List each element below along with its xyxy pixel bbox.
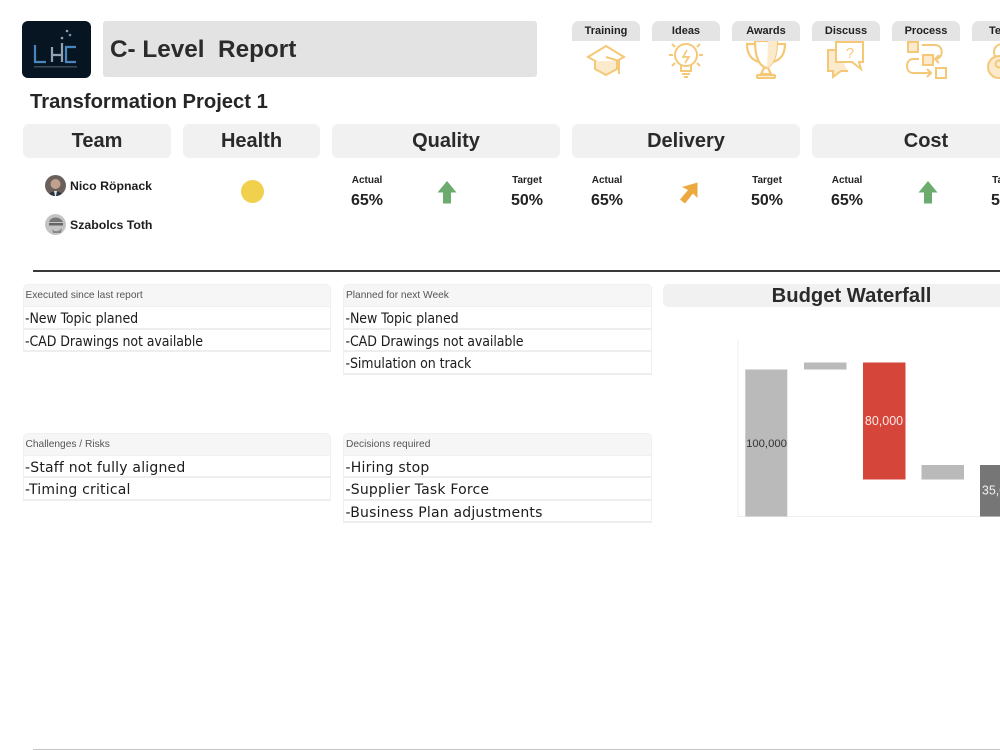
name: Szabolcs Toth: Szabolcs Toth [70, 218, 152, 232]
tab: Awards: Awards [746, 25, 786, 37]
item: -New Topic planed [346, 311, 459, 327]
icon: process flow [906, 41, 947, 79]
panel heading: Challenges / Risks [26, 438, 110, 450]
tab: Process: Process [905, 25, 947, 37]
header: Team [23, 124, 171, 158]
icon: quality arrow up [438, 181, 456, 204]
icon: delivery arrow diagonal [680, 182, 698, 204]
quality actual label: Actual [352, 174, 382, 186]
item: -Timing critical [25, 482, 131, 498]
item [343, 330, 652, 352]
panel heading: Planned for next Week [346, 290, 449, 301]
item [22, 330, 331, 352]
icon: discussion bubbles [827, 41, 864, 79]
tab: Ideas: Ideas [672, 25, 700, 37]
bar: 80,000 [863, 362, 906, 480]
panel: challenges and risks [23, 433, 331, 501]
title bar [103, 21, 537, 77]
tab: Ideas [652, 21, 720, 41]
logo [22, 21, 91, 78]
item: -New Topic planed [25, 311, 138, 327]
delivery actual value: 65% [591, 192, 623, 209]
item [343, 352, 652, 374]
icon: graduation cap [586, 44, 626, 76]
panel heading [343, 432, 652, 456]
quality actual value: 65% [351, 192, 383, 209]
icon: trophy [746, 41, 786, 79]
bar: 100,000: 100,000 [746, 438, 787, 450]
panel heading [22, 432, 331, 456]
item: -CAD Drawings not available [346, 334, 523, 350]
tab: Training: Training [585, 25, 627, 37]
tab: Training [572, 21, 640, 41]
avatar: Nico Röpnack [45, 175, 66, 196]
bar: step down [922, 465, 964, 480]
panel heading [22, 284, 331, 307]
header: Health [183, 124, 320, 158]
item: -Supplier Task Force [346, 482, 489, 498]
delivery actual label: Actual [592, 174, 622, 186]
bar: 100,000 [745, 370, 787, 516]
panel heading [343, 284, 652, 307]
delivery target value: 50% [751, 192, 783, 209]
header: Delivery: Delivery [647, 130, 725, 152]
health status dot [241, 180, 264, 203]
bar: 35,000 [980, 465, 1000, 516]
header: Quality [332, 124, 560, 158]
item: -Hiring stop [346, 460, 429, 476]
chart: budget waterfall [738, 340, 1000, 517]
avatar: Szabolcs Toth [45, 214, 66, 235]
tab: Discuss [812, 21, 880, 41]
panel: planned for next week [343, 284, 652, 375]
item [22, 478, 331, 500]
item [343, 456, 652, 478]
item: -Staff not fully aligned [25, 460, 185, 476]
title bar: C- Level Report [110, 36, 296, 63]
item [22, 307, 331, 330]
subtitle: Transformation Project 1 [30, 91, 268, 113]
item: -Business Plan adjustments [346, 504, 543, 520]
quality target value: 50% [511, 192, 543, 209]
item [22, 456, 331, 478]
item [343, 500, 652, 523]
delivery target label: Target [752, 174, 782, 186]
header: Cost [812, 124, 1000, 158]
bar: small step [804, 362, 846, 370]
tab: Process [892, 21, 960, 41]
panel heading: Executed since last report [26, 290, 143, 301]
header: Delivery [572, 124, 800, 158]
icon: light bulb [669, 43, 703, 78]
tab: Discuss: Discuss [825, 25, 867, 37]
panel: executed since last report [23, 284, 331, 352]
item [343, 307, 652, 330]
header: Quality: Quality [412, 130, 480, 152]
header: Health: Health [221, 130, 282, 152]
header: Team: Team [72, 130, 122, 152]
item [343, 478, 652, 500]
tab: Team [972, 21, 1000, 41]
item: -Simulation on track [346, 356, 471, 372]
panel: decisions required [343, 433, 652, 523]
panel heading: Decisions required [346, 438, 430, 450]
cost actual label: Actual [832, 174, 862, 186]
icon: cost arrow up [918, 181, 938, 204]
tab: Awards [732, 21, 800, 41]
heading: Budget Waterfall [663, 284, 1000, 306]
name: Nico Röpnack: Nico Röpnack [70, 179, 152, 193]
cost actual value: 65% [831, 192, 863, 209]
bar: 80,000: 80,000 [865, 414, 903, 428]
icon: discussion bubbles: ? [846, 45, 854, 62]
header: Cost: Cost [904, 130, 948, 152]
icon: team [987, 43, 1000, 79]
item: -CAD Drawings not available [25, 334, 203, 350]
heading: Budget Waterfall: Budget Waterfall [772, 285, 931, 307]
quality target label: Target [512, 174, 542, 186]
